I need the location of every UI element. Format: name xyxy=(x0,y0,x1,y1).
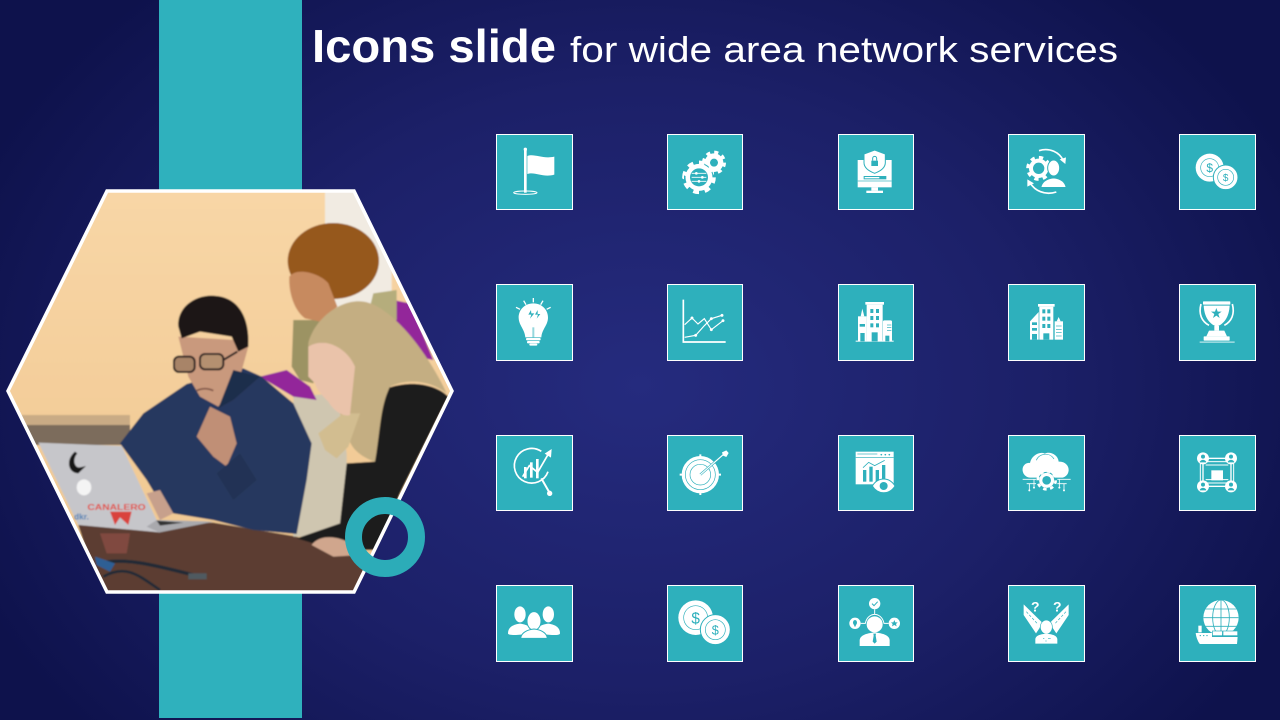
icon: person with two roads and question marks: ? xyxy=(1031,599,1040,615)
title: for wide area network services xyxy=(570,29,1118,70)
tile: buildings one xyxy=(838,284,914,360)
tile: buildings two xyxy=(1008,284,1084,360)
tile: cloud gear xyxy=(1008,436,1084,510)
icon: person with two roads and question marks: ? xyxy=(1053,599,1062,615)
tile: browser analytics eye xyxy=(838,436,914,510)
icon: two dollar coins xyxy=(1196,154,1238,190)
icon: large dollar coins xyxy=(678,600,730,645)
icon: globe with cargo ship xyxy=(1195,600,1239,644)
tile: trophy xyxy=(1180,284,1256,360)
icon: flag xyxy=(514,148,554,194)
hexagon photo: three colleagues at a laptop: CANALERO xyxy=(87,502,146,512)
tile: team xyxy=(496,586,572,662)
title xyxy=(312,20,1118,72)
tile: analysis magnifier xyxy=(496,436,572,510)
icon: line chart xyxy=(683,300,726,342)
icon: group of three people xyxy=(508,606,560,638)
tile: target xyxy=(668,436,742,510)
tile: gear and person xyxy=(1008,134,1084,210)
title: Icons slide xyxy=(312,20,556,72)
tile: dollar coins xyxy=(668,586,742,662)
decorative teal ring xyxy=(354,506,416,568)
icon: large dollar coins: $ xyxy=(712,623,719,637)
icon: four connected people xyxy=(1197,452,1237,492)
tile: network nodes xyxy=(1180,436,1256,510)
icon: monitor with shield lock xyxy=(858,150,892,193)
tile: secure monitor xyxy=(838,134,914,210)
icon: gear, person and cycle arrows xyxy=(1027,150,1066,193)
icon: businessperson with three options xyxy=(849,598,900,646)
teal vertical strip xyxy=(159,0,302,718)
icon: trophy xyxy=(1200,301,1235,342)
tile: flag xyxy=(496,134,572,210)
icon: large dollar coins: $ xyxy=(691,610,700,627)
icon: two dollar coins: $ xyxy=(1206,161,1213,175)
icon: light bulb xyxy=(516,298,551,346)
hexagon photo: three colleagues at a laptop: dkr. xyxy=(74,511,89,521)
tile: line chart xyxy=(668,284,742,360)
icon: gears with sliders xyxy=(684,152,724,192)
icon: browser chart with eye xyxy=(856,452,895,493)
tile: globe and ship xyxy=(1180,586,1256,662)
icon: city buildings xyxy=(856,302,894,342)
icon: magnifier with growth chart xyxy=(514,448,552,496)
icon: two dollar coins: $ xyxy=(1223,173,1229,184)
tile: light bulb xyxy=(496,284,572,360)
tile: coins xyxy=(1180,134,1256,210)
icon: target with arrow xyxy=(680,450,729,495)
icon: office buildings xyxy=(1030,304,1063,340)
tile: gears xyxy=(668,134,742,210)
hexagon photo: three colleagues at a laptop xyxy=(0,190,460,593)
tile: person hub xyxy=(838,586,914,662)
tile: person at crossroads xyxy=(1008,586,1084,662)
icon: cloud with gear and circuits xyxy=(1023,453,1071,491)
icon: person with two roads and question marks xyxy=(1024,599,1069,644)
